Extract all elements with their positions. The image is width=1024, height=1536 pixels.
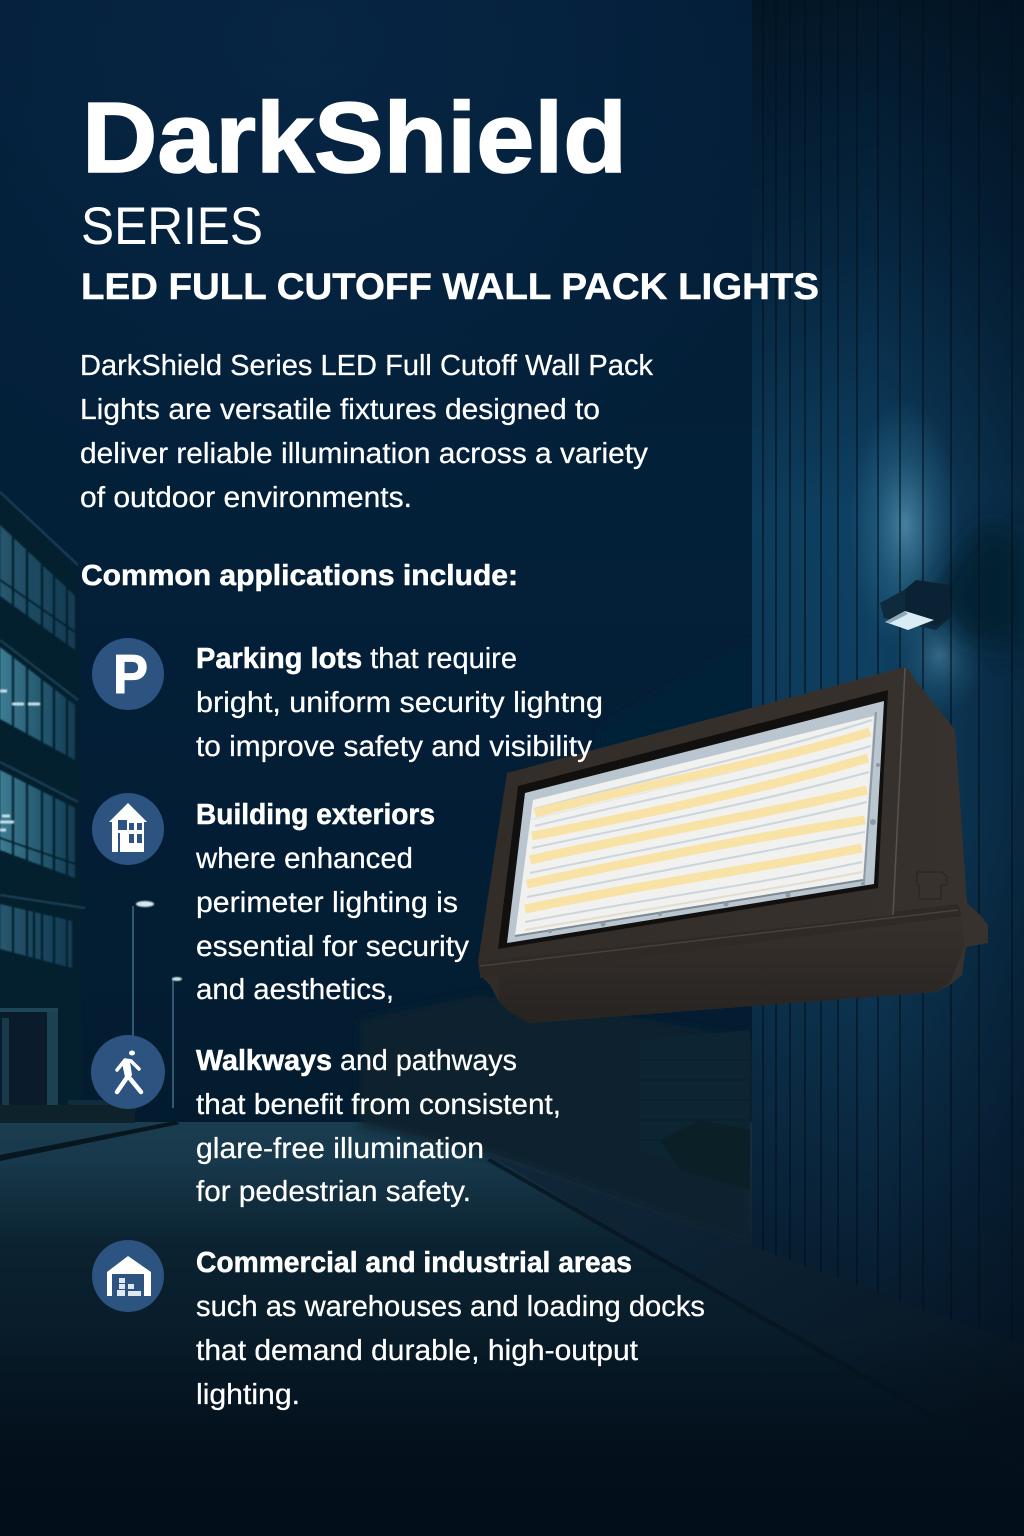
intro paragraph: DarkShield Series LED Full Cutoff Wall Pack bbox=[80, 350, 653, 382]
lens screws bbox=[548, 763, 880, 933]
text: walkways: Walkways and pathways bbox=[196, 1045, 517, 1077]
text: walkways bbox=[196, 1045, 561, 1208]
subtitle: series: SERIES bbox=[81, 197, 263, 256]
text: building exteriors: perimeter lighting is bbox=[196, 887, 458, 919]
section heading: Common applications include: bbox=[81, 560, 518, 592]
text: commercial and industrial: lighting. bbox=[196, 1379, 300, 1411]
icon: building bbox=[92, 793, 164, 865]
text: parking lots: bright, uniform security lightng bbox=[196, 687, 603, 719]
distant building and street scene bbox=[0, 490, 1024, 1536]
text: commercial and industrial: such as warehouses and loading docks bbox=[196, 1291, 705, 1323]
text: walkways: for pedestrian safety. bbox=[196, 1176, 471, 1208]
text: building exteriors bbox=[195, 799, 470, 1006]
intro paragraph: deliver reliable illumination across a variety bbox=[80, 438, 649, 470]
text: parking lots: Parking lots that require bbox=[196, 643, 517, 675]
icon: parking: P bbox=[113, 643, 148, 705]
fixture front frame bbox=[478, 667, 911, 962]
text: building exteriors: and aesthetics, bbox=[196, 974, 394, 1006]
building wall with small lit fixture bbox=[752, 0, 1024, 1345]
product: LED full cutoff wall pack bbox=[478, 667, 988, 1023]
icon: parking bbox=[92, 638, 164, 710]
subtitle: product type: LED FULL CUTOFF WALL PACK LIGHTS bbox=[81, 266, 819, 307]
application: parking lots bbox=[92, 638, 603, 763]
text: commercial and industrial bbox=[196, 1247, 705, 1411]
application: commercial and industrial bbox=[92, 1240, 705, 1411]
text: commercial and industrial: that demand durable, high-output bbox=[196, 1335, 638, 1367]
title: DarkShield bbox=[82, 82, 627, 194]
text: parking lots bbox=[196, 643, 603, 763]
intro paragraph bbox=[80, 350, 653, 514]
text: building exteriors: essential for security bbox=[196, 931, 470, 963]
intro paragraph: Lights are versatile fixtures designed to bbox=[80, 394, 600, 426]
application: building exteriors bbox=[92, 793, 470, 1006]
application: walkways bbox=[91, 1035, 561, 1208]
icon: warehouse bbox=[92, 1240, 164, 1312]
icon: pedestrian bbox=[91, 1035, 165, 1109]
text: parking lots: to improve safety and visibility bbox=[196, 731, 593, 763]
text: building exteriors: Building exteriors bbox=[196, 799, 435, 831]
intro paragraph: of outdoor environments. bbox=[80, 482, 412, 514]
text: commercial and industrial: Commercial and industrial areas bbox=[196, 1247, 632, 1279]
text: walkways: glare-free illumination bbox=[196, 1133, 484, 1165]
text: walkways: that benefit from consistent, bbox=[196, 1089, 561, 1121]
LED strips bbox=[525, 732, 870, 909]
icon: small wall light bbox=[880, 580, 950, 630]
fixture side and base housing bbox=[478, 667, 988, 1023]
louvers bbox=[525, 720, 872, 930]
clear lens bbox=[507, 701, 884, 943]
recessed black gasket bbox=[498, 690, 888, 949]
text: building exteriors: where enhanced bbox=[195, 843, 413, 875]
